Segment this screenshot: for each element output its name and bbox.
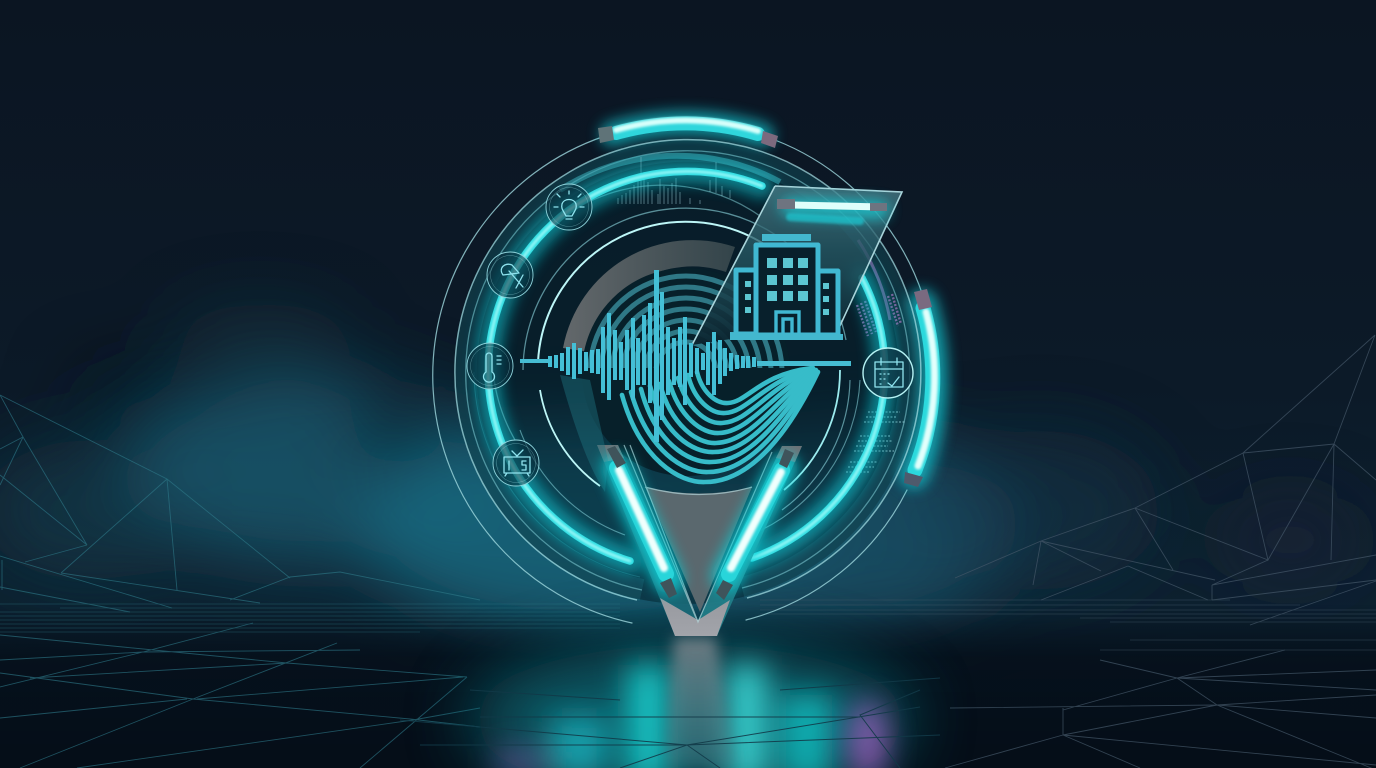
wireframe terrain: left [0, 395, 620, 768]
left V tube [607, 446, 677, 598]
right V tube [716, 449, 794, 600]
floor reflections [470, 637, 910, 768]
icon: light bulb [546, 184, 592, 230]
V steel tips [597, 445, 802, 636]
floor [0, 605, 1376, 768]
glow reflection: teal streaks [495, 665, 832, 768]
data readouts [618, 157, 906, 472]
left glass shard [560, 375, 608, 492]
neon tube: right [904, 289, 935, 487]
panel neon tube [777, 199, 887, 221]
waveform baseline [520, 359, 851, 366]
glow reflection: violet streak [848, 700, 888, 768]
sound waveform [520, 270, 851, 442]
swoosh stripes [622, 368, 818, 482]
V left arm [597, 445, 717, 636]
icon: thermometer [467, 343, 513, 389]
floor grid: center [400, 678, 940, 768]
V right arm [675, 446, 802, 636]
disc backing [454, 140, 918, 604]
icon: satellite dish [487, 252, 533, 298]
icon: office building [730, 234, 843, 340]
wireframe terrain: right [760, 335, 1376, 768]
teal fog [0, 304, 1360, 635]
metal crescent [563, 240, 735, 352]
spectrum ticks: top [618, 157, 730, 204]
inner thin rings [492, 185, 860, 535]
neon tube: top [598, 120, 778, 148]
thin outer arc: right [746, 140, 923, 620]
V base reflection [665, 637, 735, 768]
icon: calendar [863, 348, 913, 398]
V monogram [560, 375, 802, 636]
data rows: violet [857, 294, 901, 336]
V center plate [645, 487, 752, 612]
V edge lines [624, 445, 772, 622]
data rows: lower right [846, 412, 906, 472]
outer ring with neon tubes [433, 120, 935, 623]
glow reflection: wide ambient [470, 645, 910, 768]
glass rings [455, 140, 921, 600]
neon ring [488, 171, 885, 561]
thin outer arc: left [433, 136, 632, 623]
glass panel [692, 186, 902, 345]
concentric grooves [582, 268, 790, 476]
icon: television [493, 440, 539, 486]
